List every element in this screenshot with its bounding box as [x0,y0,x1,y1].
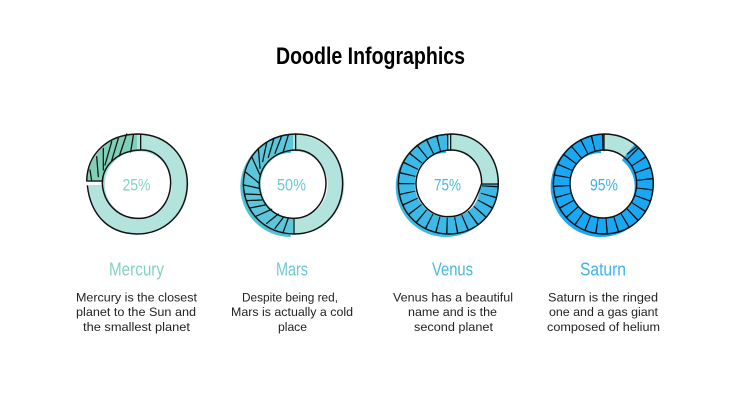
donut chart: Mars 50% [243,134,343,234]
text block: Mars description: Mars is actually a cold [231,305,353,319]
donut chart: Mercury 25% [85,134,187,234]
text block: Venus description: second planet [414,320,494,334]
percentage: 75%: 75% [434,176,461,194]
heading: Saturn: Saturn [580,260,626,280]
text block: Mars description: Despite being red, [242,290,338,304]
text block: Mercury description: planet to the Sun and [76,305,196,319]
text block: Venus description: Venus has a beautiful [393,290,513,304]
text block: Saturn description: composed of helium [547,320,660,334]
panel: Venus [393,134,513,334]
text block: Saturn description: Saturn is the ringed [548,290,658,304]
text block: Mercury description: Mercury is the closest [76,290,198,304]
panel: Saturn [547,134,660,334]
panel: Mars [231,134,353,334]
heading: Mercury: Mercury [109,260,164,280]
text block: Mercury description [76,290,198,334]
text block: Venus description: name and is the [408,305,497,319]
text block: Mars description: place [278,320,307,334]
percentage: 95%: 95% [590,176,618,194]
title: Doodle Infographics [276,43,465,70]
text block: Mars description [231,290,353,334]
text block: Saturn description: one and a gas giant [549,305,659,319]
donut chart: Venus 75% [398,134,498,234]
percentage: 50%: 50% [277,176,306,194]
text block: Venus description [393,290,513,334]
text block: Saturn description [547,290,660,334]
heading: Venus: Venus [432,260,473,280]
percentage: 25%: 25% [122,176,150,194]
panel: Mercury [76,134,198,334]
heading: Mars: Mars [276,260,308,280]
donut chart: Saturn 95% [553,134,653,234]
text block: Mercury description: the smallest planet [83,320,191,334]
